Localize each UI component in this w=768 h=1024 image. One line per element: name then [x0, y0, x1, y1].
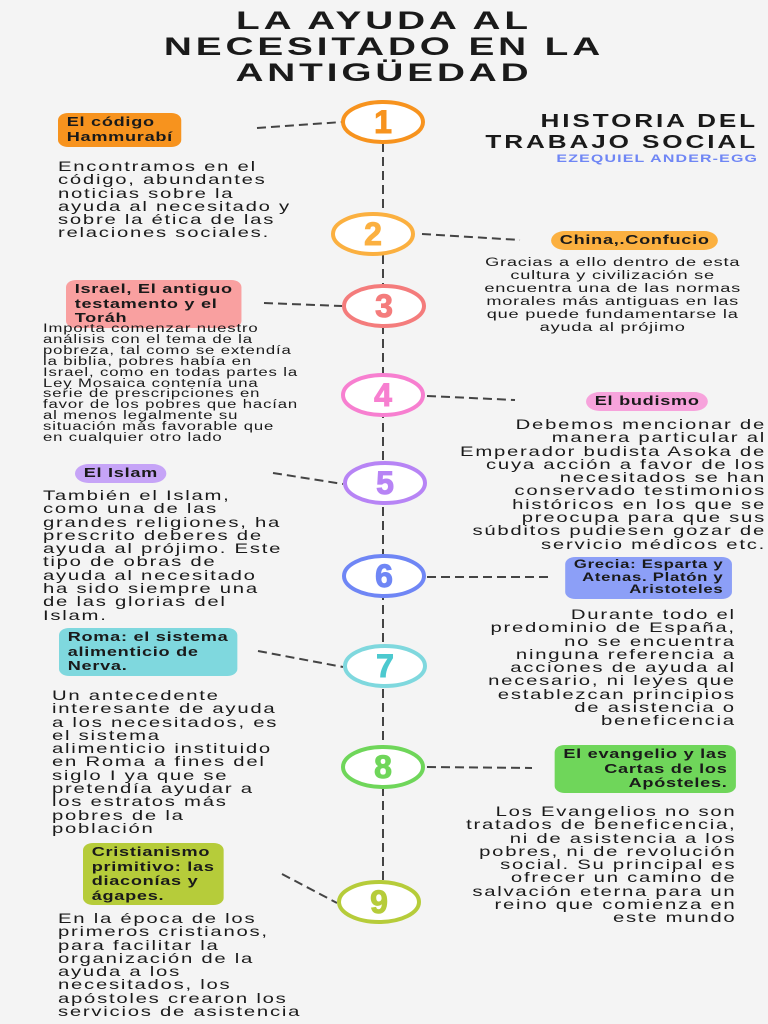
tag 6: Aristoteles — [629, 584, 723, 596]
text 1: sobre la ética de las — [58, 211, 275, 227]
text 4 — [460, 416, 766, 552]
text 5: ayuda al prójimo. Este — [43, 540, 282, 556]
tag 5: El Islam — [84, 466, 158, 480]
subtitle — [485, 111, 758, 152]
circle 3: 3 — [375, 288, 393, 324]
circle 7: 7 — [376, 648, 394, 684]
text 3: favor de los pobres que hacían — [43, 399, 298, 411]
tag 7 — [59, 628, 237, 676]
circle 9 — [339, 882, 419, 922]
tag 6 — [565, 557, 732, 599]
circle 6 — [344, 556, 424, 596]
text 8: este mundo — [613, 909, 736, 925]
tag 5 — [75, 464, 167, 483]
text 5: También el Islam, — [43, 487, 231, 503]
text 9: servicios de asistencia — [58, 1003, 301, 1019]
text 8: Los Evangelios no son — [495, 803, 736, 819]
text 3 — [43, 323, 298, 444]
text 1: noticias sobre la — [58, 185, 234, 201]
text 6: beneficencia — [601, 712, 736, 728]
text 3: Importa comenzar nuestro — [43, 323, 259, 335]
text 3: al menos legalmente su — [43, 410, 238, 422]
text 6 — [488, 606, 736, 728]
tag 3 — [66, 280, 241, 328]
tag 1: El código — [67, 115, 155, 129]
text 3: Israel, como en todas partes la — [43, 367, 298, 379]
circle 4: 4 — [374, 377, 392, 413]
text 7: alimenticio instituido — [52, 740, 272, 756]
text 7: a los necesitados, es — [52, 714, 278, 730]
text 8: tratados de beneficencia, — [466, 816, 736, 832]
circle 8: 8 — [374, 749, 392, 785]
tag 6: Atenas. Platón y — [582, 572, 723, 584]
text 1: ayuda al necesitado y — [58, 198, 291, 214]
tag 8 — [554, 745, 736, 792]
text 8 — [466, 803, 736, 925]
text 3: pobreza, tal como se extendía — [43, 345, 292, 357]
tag 9 — [83, 843, 223, 905]
tag 8: Apósteles. — [628, 776, 727, 790]
text 3: serie de prescripciones en — [43, 388, 260, 400]
author: EZEQUIEL ANDER-EGG — [556, 153, 758, 165]
text 3: situación más favorable que — [43, 421, 274, 433]
text 2: Gracias a ello dentro de esta — [485, 257, 740, 269]
subtitle: TRABAJO SOCIAL — [485, 132, 758, 152]
tag 8: El evangelio y las — [563, 747, 727, 761]
text 2 — [484, 257, 741, 334]
text 8: reino que comienza en — [494, 896, 736, 912]
tag 9: Cristianismo — [92, 845, 210, 859]
tag 9: primitivo: las — [92, 860, 215, 874]
text 9: ayuda a los — [58, 963, 181, 979]
text 9: primeros cristianos, — [58, 923, 269, 939]
text 7: interesante de ayuda — [52, 700, 276, 716]
text 6: acciones de ayuda al — [510, 659, 736, 675]
text 1: relaciones sociales. — [58, 224, 270, 240]
text 5: como una de las — [43, 500, 218, 516]
circle 1: 1 — [374, 104, 392, 140]
text 5 — [43, 487, 282, 623]
tag 1: Hammurabí — [67, 130, 173, 144]
text 7: siglo I ya que se — [52, 767, 228, 783]
tag 4: El budismo — [594, 394, 699, 408]
tag 7: Roma: el sistema — [68, 630, 228, 644]
text 3: análisis con el tema de la — [43, 334, 253, 346]
tag 1 — [58, 113, 182, 147]
text 4: cuya acción a favor de los — [486, 456, 766, 472]
circle 2 — [333, 214, 413, 254]
text 6: de asistencia o — [574, 699, 736, 715]
text 3: en cualquier otro lado — [43, 432, 223, 444]
text 1 — [58, 158, 291, 240]
text 4: necesitados se han — [560, 469, 766, 485]
text 4: súbditos pudiesen gozar de — [472, 522, 766, 538]
text 1: Encontramos en el — [58, 158, 257, 174]
title — [164, 7, 604, 87]
text 3: Ley Mosaica contenía una — [43, 378, 259, 390]
text 7: pretendía ayudar a — [52, 780, 254, 796]
text 9 — [58, 910, 301, 1019]
circle 5 — [345, 463, 425, 503]
tag 8: Cartas de los — [604, 762, 727, 776]
tag 2 — [551, 231, 718, 250]
text 1: código, abundantes — [58, 171, 267, 187]
title: ANTIGÜEDAD — [235, 59, 533, 87]
tag 7: alimenticio de — [68, 644, 199, 658]
text 8: ofrecer un camino de — [510, 869, 736, 885]
text 4: Emperador budista Asoka de — [460, 443, 766, 459]
text 9: En la época de los — [58, 910, 256, 926]
text 7 — [52, 687, 278, 836]
text 4: Debemos mencionar de — [516, 416, 766, 432]
circle 7 — [345, 646, 425, 686]
text 3: la biblia, pobres había en — [43, 356, 252, 368]
text 5: tipo de obras de — [43, 553, 216, 569]
tag 7: Nerva. — [68, 659, 127, 673]
text 6: necesario, ni leyes que — [488, 672, 736, 688]
text 9: para facilitar la — [58, 937, 220, 953]
circle 6: 6 — [375, 558, 393, 594]
text 6: ninguna referencia a — [516, 646, 736, 662]
text 7: Un antecedente — [52, 687, 220, 703]
text 8: social. Su principal es — [500, 856, 736, 872]
circle 8 — [343, 747, 423, 787]
text 5: prescrito deberes de — [43, 527, 263, 543]
text 4: preocupa para que sus — [522, 509, 766, 525]
tag 2: China,.Confucio — [559, 233, 709, 247]
text 5: de las glorias del — [43, 593, 227, 609]
text 7: población — [52, 820, 155, 836]
text 6: Durante todo el — [571, 606, 736, 622]
text 2: que puede fundamentarse la — [487, 309, 739, 321]
text 9: apóstoles crearon los — [58, 990, 288, 1006]
title: NECESITADO EN LA — [164, 33, 604, 61]
text 8: ni de asistencia a los — [509, 830, 736, 846]
text 7: el sistema — [52, 727, 161, 743]
text 6: establezcan principios — [498, 686, 736, 702]
text 6: predominio de España, — [491, 619, 736, 635]
text 7: pobres de la — [52, 807, 185, 823]
text 5: grandes religiones, ha — [43, 514, 281, 530]
text 2: ayuda al prójimo — [540, 322, 686, 334]
text 8: salvación eterna para un — [472, 883, 736, 899]
title: LA AYUDA AL — [236, 7, 532, 35]
tag 3: Toráh — [75, 311, 127, 325]
circle 4 — [343, 375, 423, 415]
text 4: conservado testimonios — [514, 482, 766, 498]
text 7: en Roma a fines del — [52, 753, 266, 769]
text 2: cultura y civilización se — [510, 270, 715, 282]
circle 2: 2 — [364, 216, 382, 252]
text 6: no se encuentra — [564, 633, 736, 649]
circle 5: 5 — [376, 465, 394, 501]
text 5: ha sido siempre una — [43, 580, 259, 596]
text 4: servicio médicos etc. — [541, 536, 766, 552]
text 2: morales más antiguas en las — [486, 296, 739, 308]
subtitle: HISTORIA DEL — [540, 111, 758, 131]
circle 9: 9 — [370, 884, 388, 920]
tag 4 — [586, 392, 708, 411]
text 5: Islam. — [43, 607, 108, 623]
tag 3: testamento y el — [75, 296, 218, 310]
text 9: organización de la — [58, 950, 254, 966]
text 8: pobres, ni de revolución — [479, 843, 736, 859]
tag 3: Israel, El antiguo — [75, 282, 233, 296]
text 4: históricos en los que se — [512, 496, 766, 512]
tag 6: Grecia: Esparta y — [574, 559, 723, 571]
text 9: necesitados, los — [58, 976, 231, 992]
text 7: los estratos más — [52, 793, 228, 809]
text 5: ayuda al necesitado — [43, 567, 257, 583]
circle 3 — [344, 286, 424, 326]
tag 9: ágapes. — [92, 888, 164, 902]
text 4: manera particular al — [552, 429, 766, 445]
circle 1 — [343, 102, 423, 142]
text 2: encuentra una de las normas — [484, 283, 741, 295]
tag 9: diaconías y — [92, 874, 198, 888]
